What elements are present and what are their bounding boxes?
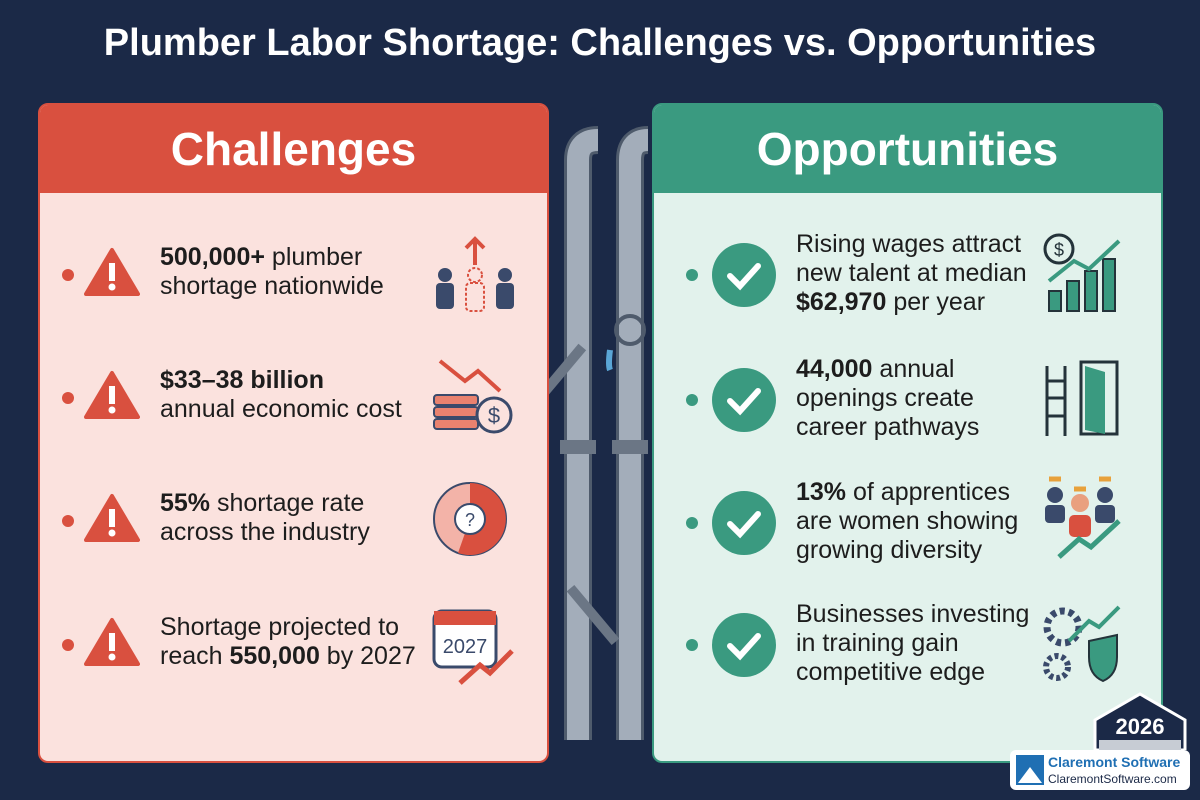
item 4: in training gain: [796, 629, 959, 657]
item 2: [686, 355, 1118, 441]
item 4: reach 550,000 by 2027: [160, 642, 416, 670]
item 1: new talent at median: [796, 259, 1027, 287]
item 4: [686, 600, 1120, 686]
item 1: [686, 230, 1120, 316]
item 3: [62, 482, 507, 556]
item 3: 13% of apprentices: [796, 478, 1010, 506]
item 4: Businesses investing: [796, 600, 1029, 628]
item 1: $62,970 per year: [796, 288, 985, 316]
item 1: Rising wages attract: [796, 230, 1021, 258]
item 4: [62, 610, 514, 685]
item 3: ?: [465, 510, 475, 530]
item 1: shortage nationwide: [160, 272, 384, 300]
item 3: are women showing: [796, 507, 1018, 535]
item 4: 2027: [443, 636, 487, 658]
item 3: 55% shortage rate: [160, 489, 364, 517]
item 2: $33–38 billion: [160, 366, 324, 394]
item 2: [62, 360, 512, 434]
heading: opportunities: Opportunities: [757, 123, 1058, 175]
logo: Claremont Software: Claremont Software: [1048, 754, 1180, 770]
item 2: career pathways: [796, 413, 979, 441]
item 1: 500,000+ plumber: [160, 243, 362, 271]
item 2: openings create: [796, 384, 974, 412]
item 3: [686, 476, 1121, 564]
panel: challenges: [38, 103, 549, 763]
logo: Claremont Software: ClaremontSoftware.com: [1048, 772, 1177, 786]
item 3: across the industry: [160, 518, 370, 546]
title: Plumber Labor Shortage: Challenges vs. Opportunities: [104, 22, 1096, 64]
item 2: 44,000 annual: [796, 355, 954, 383]
item 2: annual economic cost: [160, 395, 402, 423]
item 2: $: [488, 403, 500, 428]
item 3: growing diversity: [796, 536, 982, 564]
item 1: [62, 236, 514, 312]
item 1: $: [1054, 240, 1064, 260]
logo: Claremont Software: [1010, 750, 1190, 790]
center pipes: [549, 126, 648, 740]
badge: 2026 industry data: [1094, 692, 1186, 750]
heading: challenges: [40, 105, 547, 193]
heading: challenges: Challenges: [171, 123, 416, 175]
heading: opportunities: [654, 105, 1161, 193]
panel: opportunities: [652, 103, 1163, 763]
item 4: Shortage projected to: [160, 613, 399, 641]
item 4: competitive edge: [796, 658, 985, 686]
badge: 2026 industry data: 2026: [1116, 714, 1164, 739]
